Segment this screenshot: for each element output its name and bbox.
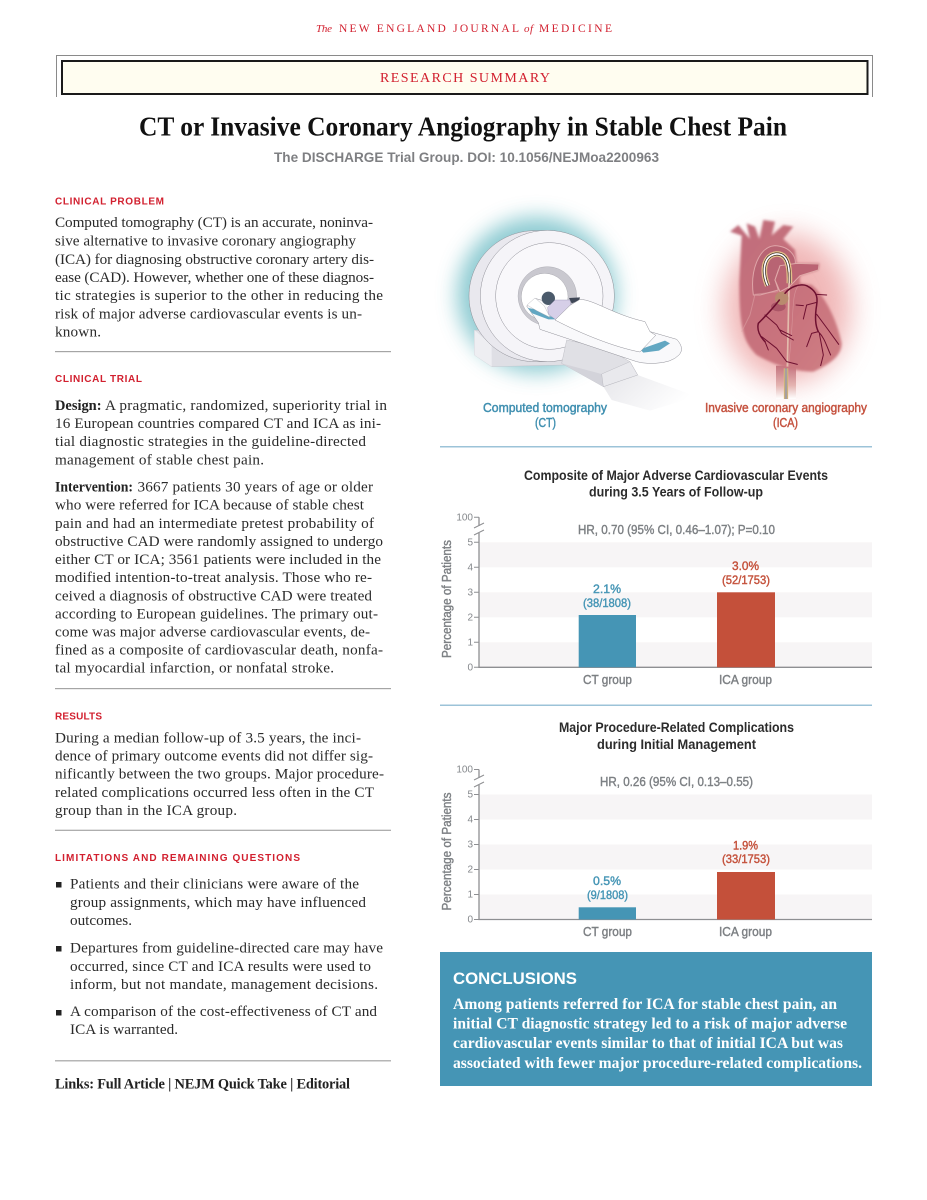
text: intervention: ceived a diagnosis of obstructive CAD were treated — [55, 587, 372, 604]
heading: clinical problem: CLINICAL PROBLEM — [55, 196, 164, 208]
research summary banner — [56, 56, 872, 97]
text: design: A pragmatic, randomized, superiority trial in — [105, 397, 387, 414]
text: intervention: either CT or ICA; 3561 patients were included in the — [55, 551, 381, 568]
illustration: CT scanner — [457, 217, 697, 411]
text: intervention: pain and had an intermediate pretest probability of — [55, 515, 375, 532]
axis: 0 — [467, 914, 473, 926]
bullet list: Patients and their clinicians were aware of the — [70, 876, 359, 893]
bullet list: Departures from guideline-directed care may have — [70, 940, 383, 957]
chart: composite of major adverse cardiovascular events — [440, 468, 872, 687]
citation: The DISCHARGE Trial Group. DOI: 10.1056/NEJMoa2200963 — [274, 150, 659, 165]
text: clinical problem body: (ICA) for diagnosing obstructive coronary artery dis- — [55, 251, 374, 268]
text: design — [55, 397, 387, 468]
panel: limitations — [55, 853, 383, 1038]
bar: ICA group: (52/1753) — [722, 573, 770, 587]
text: intervention — [55, 478, 383, 677]
text: conclusions body: Among patients referred for ICA for stable chest pain, an — [453, 996, 837, 1013]
text: conclusions body: initial CT diagnostic strategy led to a risk of major adverse — [453, 1016, 847, 1033]
journal masthead: of — [524, 23, 535, 35]
bar: CT group: 0.5% — [593, 874, 621, 888]
axis: 5 — [467, 538, 473, 548]
text: results body — [55, 729, 384, 819]
axis: 1 — [467, 890, 473, 900]
text: design: 16 European countries compared CT and ICA as ini- — [55, 415, 381, 432]
axis: Percentage of Patients — [440, 540, 454, 658]
bar: ICA group — [717, 838, 775, 939]
journal masthead: The — [316, 23, 332, 35]
text: intervention: who were referred for ICA because of stable chest — [55, 497, 365, 514]
bar: CT group: CT group — [583, 925, 632, 939]
links: Links: Full Article | NEJM Quick Take | Editorial — [55, 1077, 350, 1093]
chart title: during 3.5 Years of Follow-up — [589, 485, 763, 500]
text: results body: During a median follow-up of 3.5 years, the inci- — [55, 729, 361, 746]
bullet list: outcomes. — [70, 912, 132, 929]
heading: limitations: LIMITATIONS AND REMAINING QUESTIONS — [55, 853, 300, 864]
axis: 100 — [456, 764, 473, 776]
chart title — [559, 720, 794, 752]
journal masthead — [316, 23, 612, 35]
label: CT — [483, 401, 608, 430]
axis: 2 — [467, 864, 473, 876]
chart: major procedure-related complications — [440, 720, 872, 939]
label: ICA: (ICA) — [773, 416, 798, 430]
bullet list: ICA is warranted. — [70, 1021, 178, 1038]
bar: ICA group: (33/1753) — [722, 852, 770, 866]
label: CT: (CT) — [535, 416, 556, 430]
text: clinical problem body: Computed tomography (CT) is an accurate, noninva- — [55, 214, 373, 231]
bar: CT group: (38/1808) — [583, 596, 631, 610]
illustration: heart with catheter — [724, 220, 851, 399]
chart title: during Initial Management — [597, 737, 756, 752]
bar: CT group — [579, 582, 636, 687]
axis: 100 — [456, 512, 473, 524]
text: results body: group than in the ICA group. — [55, 802, 237, 819]
research summary banner: RESEARCH SUMMARY — [380, 71, 550, 86]
text: intervention: come was major adverse cardiovascular events, de- — [55, 624, 370, 640]
text: conclusions body — [453, 996, 862, 1072]
journal masthead: MEDICINE — [539, 23, 612, 35]
chart title: Major Procedure-Related Complications — [559, 720, 794, 735]
bullet list: inform, but not mandate, management decisions. — [70, 976, 378, 993]
text: design: tial diagnostic strategies in the guideline-directed — [55, 433, 366, 450]
axis: 3 — [467, 840, 473, 850]
bar: ICA group: ICA group — [719, 925, 772, 939]
heading: clinical trial: CLINICAL TRIAL — [55, 374, 142, 385]
label: CT: Computed tomography — [483, 401, 608, 415]
text: intervention: obstructive CAD were randomly assigned to undergo — [55, 533, 383, 550]
text: results body: nificantly between the two groups. Major procedure- — [55, 766, 384, 783]
text: intervention: Intervention: — [55, 480, 133, 496]
text: clinical problem body: tic strategies is superior to the other in reducing the — [55, 287, 383, 304]
panel: conclusions — [440, 952, 872, 1086]
text: intervention: according to European guidelines. The primary out- — [55, 605, 378, 622]
bullet list: group assignments, which may have influenced — [70, 894, 366, 911]
text: clinical problem body: sive alternative to invasive coronary angiography — [55, 232, 356, 250]
bullet list: occurred, since CT and ICA results were used to — [70, 958, 371, 975]
bar: CT group: 2.1% — [593, 582, 621, 596]
text: design: Design: — [55, 398, 102, 414]
label: ICA — [705, 401, 868, 430]
bar: ICA group: 3.0% — [732, 559, 759, 573]
hazard ratio: HR, 0.26 (95% CI, 0.13–0.55) — [600, 775, 753, 789]
text: clinical problem body: risk of major adverse cardiovascular events is un- — [55, 306, 362, 322]
axis: 5 — [467, 790, 473, 800]
bullet list: A comparison of the cost-effectiveness of CT and — [70, 1003, 377, 1020]
bar: ICA group: 1.9% — [733, 838, 758, 852]
text: intervention: tal myocardial infarction, or nonfatal stroke. — [55, 660, 334, 677]
chart title: Composite of Major Adverse Cardiovascular Events — [524, 468, 828, 483]
panel: clinical trial — [55, 374, 387, 677]
panel: results — [55, 712, 384, 819]
text: intervention: modified intention-to-treat analysis. Those who re- — [55, 569, 372, 586]
panel: clinical problem — [55, 196, 383, 340]
catheter arch — [764, 254, 789, 399]
bullet list — [56, 876, 383, 1038]
axis: 3 — [467, 588, 473, 598]
title: CT or Invasive Coronary Angiography in Stable Chest Pain — [139, 112, 787, 142]
text: clinical problem body — [55, 214, 383, 340]
bar: ICA group — [717, 559, 775, 687]
axis: 1 — [467, 638, 473, 648]
text: clinical problem body: known. — [55, 324, 101, 340]
text: intervention: fined as a composite of cardiovascular death, nonfa- — [55, 642, 383, 659]
text: intervention: 3667 patients 30 years of age or older — [138, 478, 373, 496]
journal masthead: NEW ENGLAND JOURNAL — [339, 23, 519, 35]
axis: 2 — [467, 612, 473, 624]
hazard ratio: HR, 0.70 (95% CI, 0.46–1.07); P=0.10 — [578, 523, 775, 537]
text: results body: related complications occurred less often in the CT — [55, 784, 375, 801]
bar: CT group: (9/1808) — [587, 888, 628, 902]
axis: Percentage of Patients — [440, 792, 454, 910]
bar: CT group — [579, 874, 636, 939]
text: conclusions body: associated with fewer major procedure-related complications. — [453, 1055, 862, 1072]
bar: CT group: CT group — [583, 673, 632, 687]
text: clinical problem body: ease (CAD). However, whether one of these diagnos- — [55, 269, 374, 286]
label: ICA: Invasive coronary angiography — [705, 401, 868, 415]
text: conclusions body: cardiovascular events similar to that of initial ICA but was — [453, 1035, 843, 1052]
bar: ICA group: ICA group — [719, 673, 772, 687]
heading: results: RESULTS — [55, 712, 102, 722]
text: results body: dence of primary outcome events did not differ sig- — [55, 747, 373, 764]
coronary arteries — [758, 285, 839, 366]
axis: 0 — [467, 662, 473, 674]
axis: 4 — [467, 814, 473, 826]
chart title — [524, 468, 828, 500]
axis: 4 — [467, 562, 473, 574]
heading: conclusions: CONCLUSIONS — [453, 969, 577, 988]
axis — [440, 764, 872, 926]
axis — [440, 512, 872, 674]
text: design: management of stable chest pain. — [55, 452, 264, 468]
